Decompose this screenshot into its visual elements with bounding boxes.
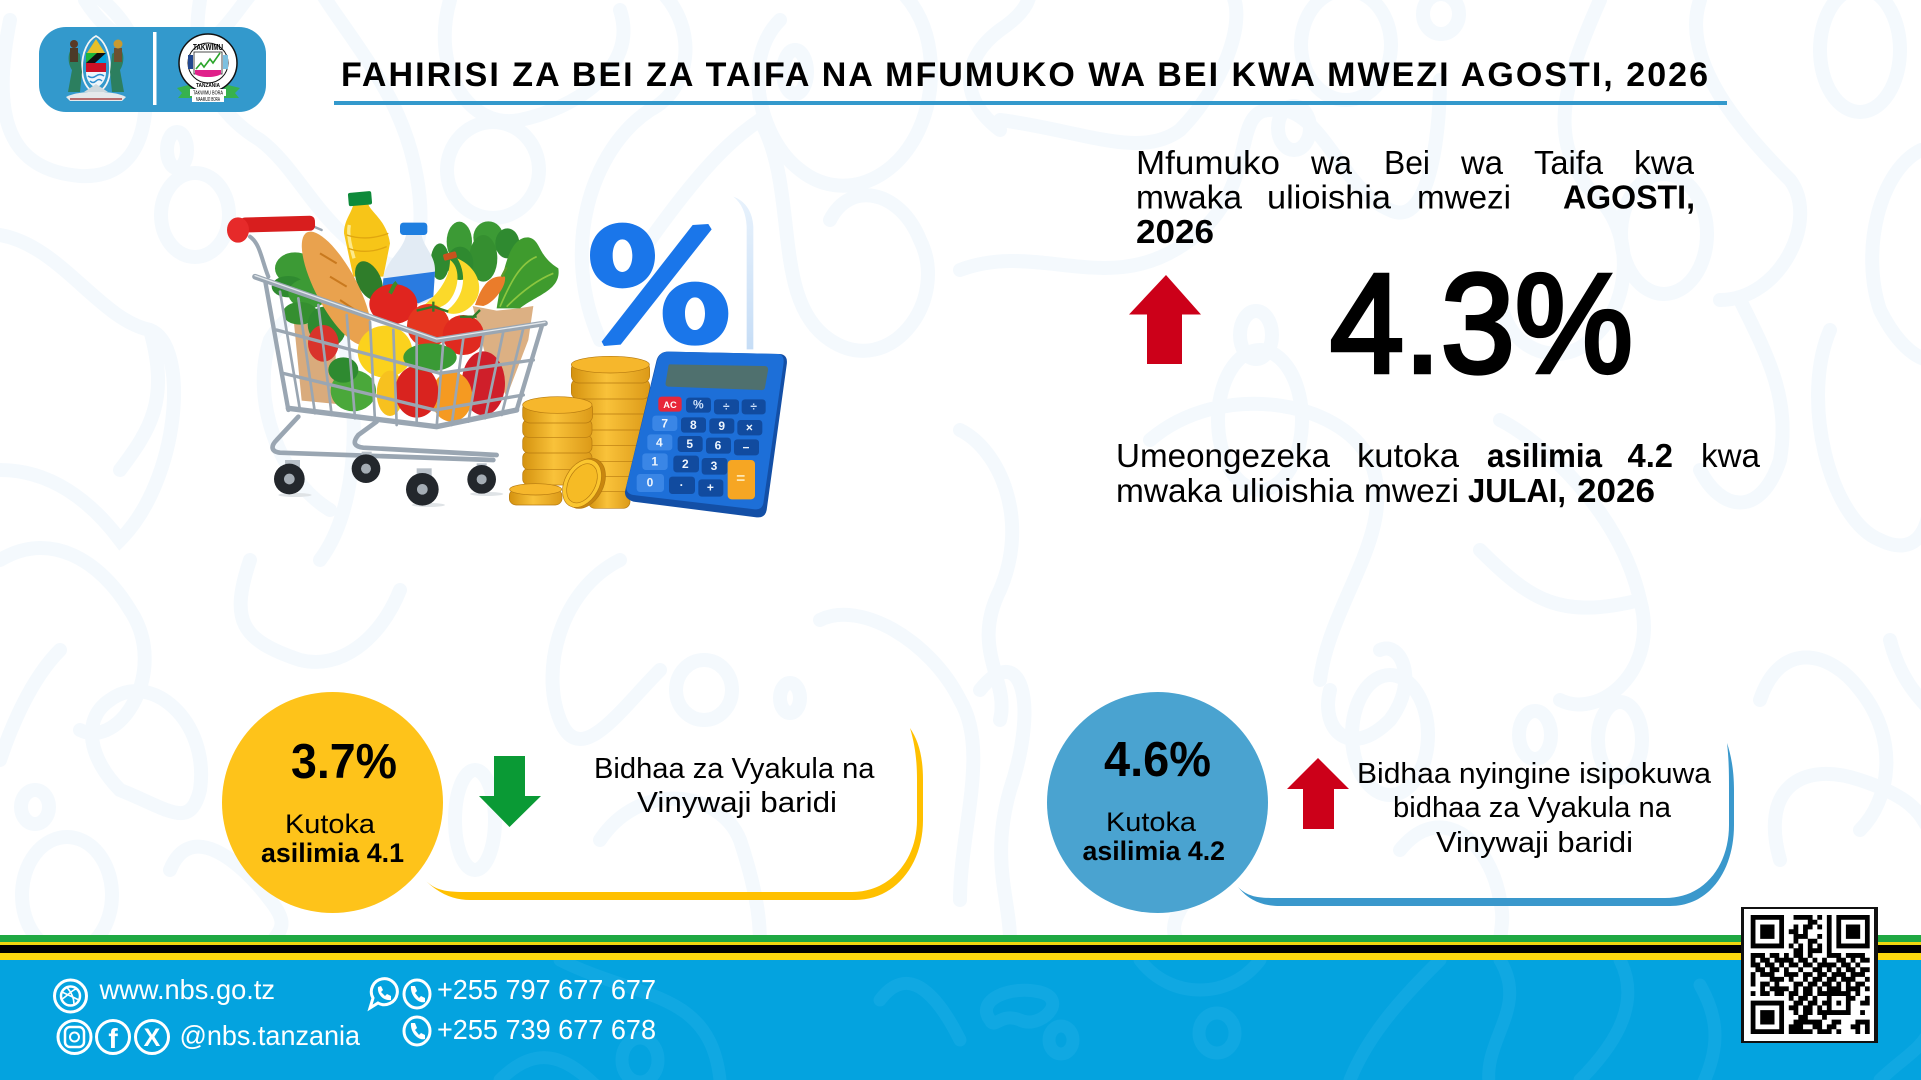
icon: TAKWIMU badge: TANZANIA	[196, 83, 220, 89]
icon: calculator: 3	[711, 459, 718, 473]
text: change from July: Umeongezeka	[1116, 437, 1331, 474]
text: change from July: kwa	[1701, 437, 1761, 474]
circle: 3.7%: Kutoka	[285, 809, 376, 839]
panel edge: blue	[1238, 743, 1734, 906]
icon: TAKWIMU badge: TAKWIMU BORA	[193, 90, 224, 96]
text: website: www.nbs.go.tz	[99, 974, 275, 1005]
headline text: national inflation: Bei	[1384, 144, 1430, 181]
headline text: national inflation: mwezi	[1417, 178, 1511, 216]
circle: 3.7%	[222, 692, 443, 913]
headline text: national inflation: Mfumuko	[1136, 144, 1280, 181]
icon: calculator: 5	[686, 437, 693, 451]
headline text: national inflation: Taifa	[1534, 144, 1604, 181]
text: food and soft drinks: Vinywaji baridi	[637, 787, 837, 819]
text: change from July: mwezi	[1364, 472, 1459, 509]
icon: TAKWIMU badge: TAKWIMU	[193, 43, 223, 52]
panel edge: yellow	[425, 728, 923, 900]
icon: TAKWIMU badge	[177, 34, 240, 103]
icon: x	[136, 1020, 168, 1054]
text: change from July: kutoka	[1357, 437, 1460, 474]
illustration: percent sign, coins and calculator	[509, 197, 787, 517]
icon: calculator: 6	[715, 439, 722, 453]
text: phone 1: +255 797 677 677	[437, 974, 656, 1005]
text: change from July: 2026	[1577, 472, 1655, 509]
flag stripe	[0, 935, 1921, 960]
icon: calculator: 9	[718, 419, 725, 433]
icon: calculator: ×	[746, 420, 753, 434]
footer band	[0, 960, 1921, 1080]
icon: whatsapp	[370, 979, 397, 1008]
circle: 3.7%: asilimia 4.1	[261, 838, 404, 868]
headline text: national inflation: kwa	[1634, 144, 1695, 181]
text: food and soft drinks: Bidhaa za Vyakula na	[594, 753, 875, 785]
icon: calculator: %	[693, 398, 704, 412]
icon: calculator: 7	[661, 416, 668, 430]
text: change from July: mwaka	[1116, 472, 1223, 509]
big number: 4.3%: 4.3%	[1330, 244, 1633, 402]
illustration: shopping cart with groceries	[227, 191, 559, 507]
icon: calculator: 8	[690, 418, 697, 432]
headline text: national inflation: ulioishia	[1267, 178, 1392, 216]
text: change from July: JULAI,	[1468, 472, 1566, 509]
panel: other goods	[1047, 692, 1734, 913]
icon: x: X	[144, 1024, 161, 1052]
icon: TAKWIMU badge: MAAMUZI BORA	[196, 97, 220, 103]
headline text: national inflation: mwaka	[1136, 178, 1243, 216]
icon: calculator: 2	[682, 457, 689, 471]
text: change from July: 4.2	[1628, 437, 1673, 474]
icon: calculator: 0	[647, 476, 654, 490]
icon: green down arrow	[479, 756, 541, 827]
icon: calculator: −	[742, 440, 749, 454]
icon: calculator: =	[736, 470, 745, 487]
icon: instagram	[58, 1020, 91, 1054]
QR code	[1741, 907, 1878, 1043]
text: other goods: bidhaa za Vyakula na	[1393, 792, 1672, 824]
headline text: national inflation: 2026	[1136, 213, 1214, 250]
icon: calculator: +	[707, 480, 714, 494]
icon: calculator: ÷	[723, 400, 730, 414]
text: social handle: @nbs.tanzania	[180, 1020, 360, 1051]
icon: phone 1	[404, 980, 430, 1008]
decorative panel edge	[733, 197, 753, 349]
text: other goods: Vinywaji baridi	[1436, 827, 1633, 859]
title: FAHIRISI ZA BEI ZA TAIFA NA MFUMUKO WA BEI KWA MWEZI AGOSTI, 2026	[341, 56, 1708, 94]
panel: food and soft drinks	[222, 692, 923, 913]
icon: calculator: AC	[663, 400, 677, 410]
icon: facebook: f	[108, 1023, 118, 1054]
icon: calculator	[625, 352, 787, 517]
circle: 3.7%: 3.7%	[291, 735, 397, 789]
circle: 4.6%: 4.6%	[1104, 733, 1211, 787]
icon: calculator: ·	[680, 478, 684, 492]
icon: calculator: ÷	[750, 400, 757, 414]
headline text: national inflation: wa	[1460, 144, 1504, 181]
text: other goods: Bidhaa nyingine isipokuwa	[1357, 758, 1712, 790]
circle: 4.6%	[1047, 692, 1268, 913]
circle: 4.6%: asilimia 4.2	[1082, 836, 1225, 866]
logo panel	[39, 27, 266, 112]
headline text: national inflation: AGOSTI,	[1563, 178, 1695, 216]
icon: website	[54, 980, 86, 1012]
icon: percent sign	[590, 223, 728, 346]
icon: facebook	[96, 1020, 130, 1054]
text: change from July: asilimia	[1487, 437, 1603, 474]
circle: 4.6%: Kutoka	[1106, 807, 1197, 837]
icon: red up arrow	[1287, 758, 1349, 829]
icon: coin stacks	[509, 356, 650, 515]
icon: calculator: 1	[651, 455, 658, 469]
icon: red up arrow	[1129, 275, 1201, 364]
icon: calculator: 4	[656, 435, 663, 449]
text: change from July: ulioishia	[1231, 472, 1355, 509]
footer contacts	[54, 974, 656, 1054]
icon: national coat of arms	[66, 36, 126, 101]
headline text: national inflation: wa	[1310, 144, 1353, 181]
text: phone 2: +255 739 677 678	[437, 1014, 656, 1045]
icon: phone 2	[404, 1017, 430, 1045]
